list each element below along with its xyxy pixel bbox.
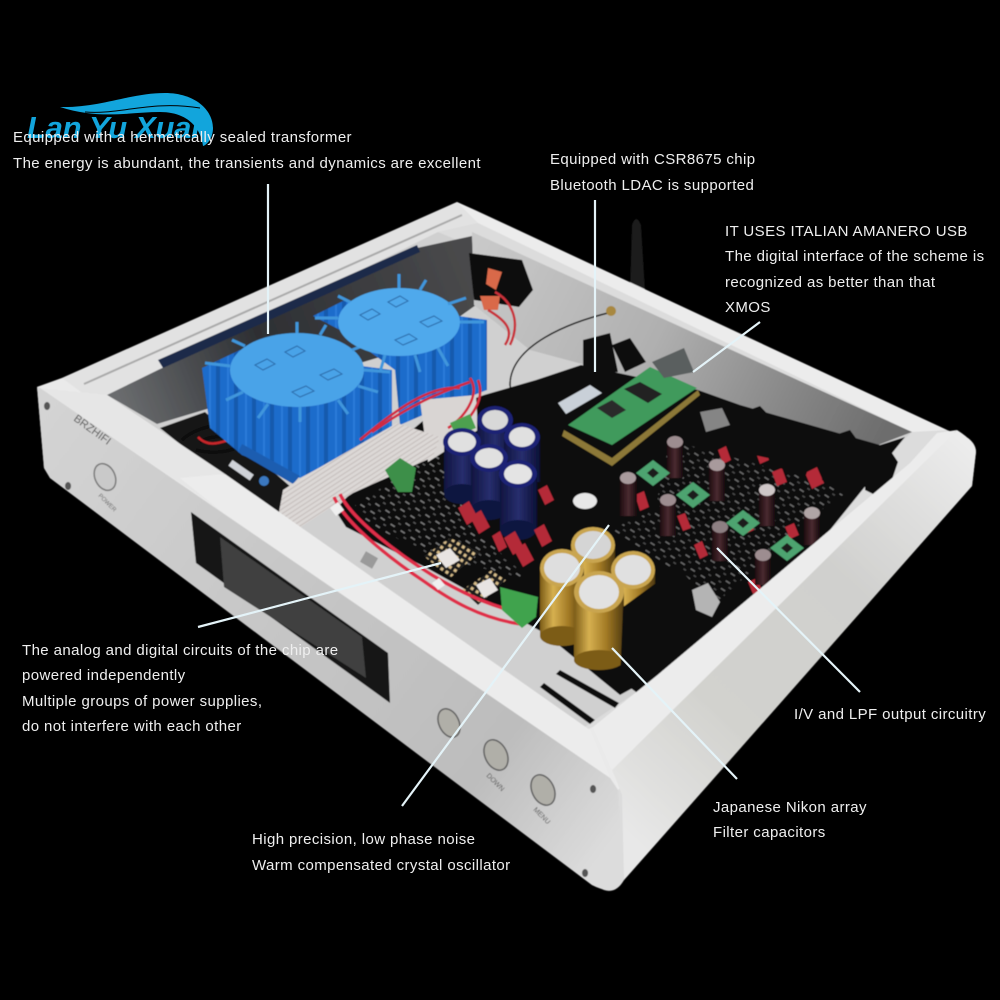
pigtail antenna wire — [510, 312, 612, 425]
gold capacitor — [611, 551, 655, 615]
left transformer — [202, 322, 392, 478]
psu red wire — [198, 437, 240, 444]
usb line 3: recognized as better than that — [725, 274, 936, 291]
power line 4: do not interfere with each other — [22, 718, 242, 735]
button — [526, 771, 560, 809]
DAC chassis photo — [37, 202, 976, 891]
gold capacitor — [540, 549, 584, 646]
gold capacitor — [571, 527, 615, 595]
line to oscillator — [402, 525, 609, 806]
line to nikon capacitors — [612, 648, 737, 779]
interior silver floor — [107, 232, 912, 730]
psu wire loop — [182, 424, 248, 452]
callout lines — [198, 184, 860, 806]
connectors — [735, 406, 815, 478]
red power wires lower — [334, 494, 520, 624]
transformer markings — [255, 346, 342, 397]
front rail inner corrected edge — [40, 388, 225, 510]
tan breakout board — [462, 570, 506, 605]
maroon capacitor — [755, 549, 771, 585]
right wall — [472, 232, 912, 450]
usb type b port — [700, 408, 730, 432]
chip — [624, 382, 662, 403]
transformer top — [230, 333, 364, 407]
logo wave — [60, 93, 213, 146]
maroon capacitor — [667, 436, 683, 478]
button — [479, 736, 513, 774]
op-amp chips — [647, 468, 793, 553]
green op-amp modules — [636, 460, 804, 561]
ribbon cable — [277, 423, 440, 532]
button label down: DOWN — [485, 772, 505, 793]
vertical white ribbon — [420, 395, 478, 462]
right side rail face — [612, 430, 976, 880]
tan breakout board — [424, 538, 480, 578]
right side rail top band — [593, 430, 957, 790]
text: nikon capacitors — [713, 799, 867, 841]
usb line 4: XMOS — [725, 299, 771, 316]
xlr connectors — [820, 430, 898, 500]
maroon capacitor — [759, 484, 775, 526]
antenna coupler — [606, 306, 616, 316]
black relay blocks — [583, 333, 646, 376]
transformer finned body — [202, 350, 392, 478]
left wall — [107, 236, 476, 424]
logo name: Lan Yu Xuan — [27, 110, 210, 145]
chassis base silhouette — [37, 202, 976, 889]
display window — [191, 512, 390, 703]
green terminal small — [385, 458, 416, 492]
display glass — [220, 537, 366, 678]
line to transformer — [267, 184, 269, 334]
green usb interface board — [568, 367, 697, 445]
navy capacitor — [477, 406, 513, 465]
oscillator line 1: High precision, low phase noise — [252, 831, 475, 848]
navy capacitor — [504, 423, 540, 482]
usb line 1: IT USES ITALIAN AMANERO USB — [725, 223, 968, 240]
bluetooth line 1: Equipped with CSR8675 chip — [550, 151, 756, 168]
red ribbon wires upper — [360, 378, 480, 440]
inlet socket — [469, 253, 533, 307]
front band — [180, 474, 610, 778]
transformer line 2: The energy is abundant, the transients and dynamics are excellent — [13, 155, 481, 172]
gold board edge — [562, 390, 700, 466]
main pcb — [335, 365, 905, 695]
navy capacitor — [499, 460, 537, 540]
menu buttons — [434, 705, 560, 809]
floor slots — [540, 670, 619, 724]
left rail groove — [84, 215, 462, 384]
text: output circuitry: I/V and LPF output circuitry — [794, 706, 986, 723]
navy capacitors — [443, 406, 540, 540]
button label menu: MENU — [532, 806, 551, 826]
maroon capacitor — [660, 494, 676, 536]
brand mark on panel: BRZHIFI — [71, 413, 113, 448]
text: bluetooth — [550, 151, 756, 194]
logo — [27, 93, 213, 146]
panel screws — [44, 402, 596, 877]
amanero usb stack — [558, 348, 700, 466]
text: crystal oscillator — [252, 831, 511, 874]
transformer top — [338, 288, 460, 356]
psu fuse — [228, 460, 254, 480]
zip ties — [330, 502, 445, 590]
text: amanero usb — [725, 223, 984, 316]
maroon capacitors — [620, 436, 820, 585]
bluetooth module — [558, 385, 602, 414]
black heatsink — [620, 567, 690, 695]
power line 1: The analog and digital circuits of the chip are — [22, 642, 338, 659]
large green terminal — [500, 587, 538, 628]
inlet wiring — [488, 292, 515, 345]
transformer markings — [360, 296, 442, 345]
bluetooth line 2: Bluetooth LDAC is supported — [550, 177, 754, 194]
power button — [90, 460, 120, 494]
pcb smt pattern — [355, 450, 530, 580]
usb jack — [652, 348, 694, 378]
maroon capacitor — [709, 459, 725, 501]
nikon line 1: Japanese Nikon array — [713, 799, 867, 816]
psu blue cap — [259, 476, 269, 486]
button — [434, 705, 464, 741]
front rail top band — [37, 378, 627, 790]
green terminal top — [450, 414, 476, 436]
button label power: POWER — [97, 493, 117, 514]
left rail — [62, 202, 478, 400]
stack base — [560, 375, 700, 466]
gold capacitors — [540, 527, 655, 670]
transformer radial fins — [205, 322, 390, 422]
gold capacitor — [574, 571, 624, 670]
power line 3: Multiple groups of power supplies, — [22, 693, 262, 710]
line to output circuitry — [717, 548, 860, 692]
transformer line 1: Equipped with a hermetically sealed transformer — [13, 129, 352, 146]
text: transformer — [13, 129, 481, 172]
pcb smt pattern right — [610, 440, 850, 600]
oscillator line 2: Warm compensated crystal oscillator — [252, 857, 511, 874]
front panel face — [37, 387, 624, 891]
line to usb — [693, 322, 760, 372]
navy capacitor — [443, 428, 481, 504]
white connectors — [436, 548, 498, 598]
inlet orange connectors — [480, 268, 502, 310]
right transformer — [313, 274, 487, 425]
silver heatsink — [692, 583, 720, 617]
maroon capacitor — [620, 472, 637, 516]
transformer base plate — [238, 444, 300, 484]
power line 2: powered independently — [22, 667, 186, 684]
line to bluetooth — [594, 200, 596, 372]
left wall blue stripe — [158, 245, 420, 368]
antenna — [630, 219, 645, 290]
back rail — [457, 202, 947, 432]
navy capacitor — [470, 444, 508, 520]
transformer radial fins — [315, 274, 484, 372]
standoff on floor — [360, 551, 378, 569]
left psu board — [160, 412, 300, 520]
line to power supplies — [198, 563, 441, 627]
maroon capacitor — [804, 507, 820, 545]
maroon capacitor — [712, 521, 728, 561]
white pcb sticker — [573, 493, 597, 509]
red film capacitors — [458, 446, 824, 594]
usb line 2: The digital interface of the scheme is — [725, 248, 984, 265]
chip — [597, 400, 626, 418]
transformer finned body — [313, 300, 487, 425]
logo wave stripe — [85, 106, 200, 112]
text: independent power — [22, 642, 338, 735]
nikon line 2: Filter capacitors — [713, 824, 826, 841]
